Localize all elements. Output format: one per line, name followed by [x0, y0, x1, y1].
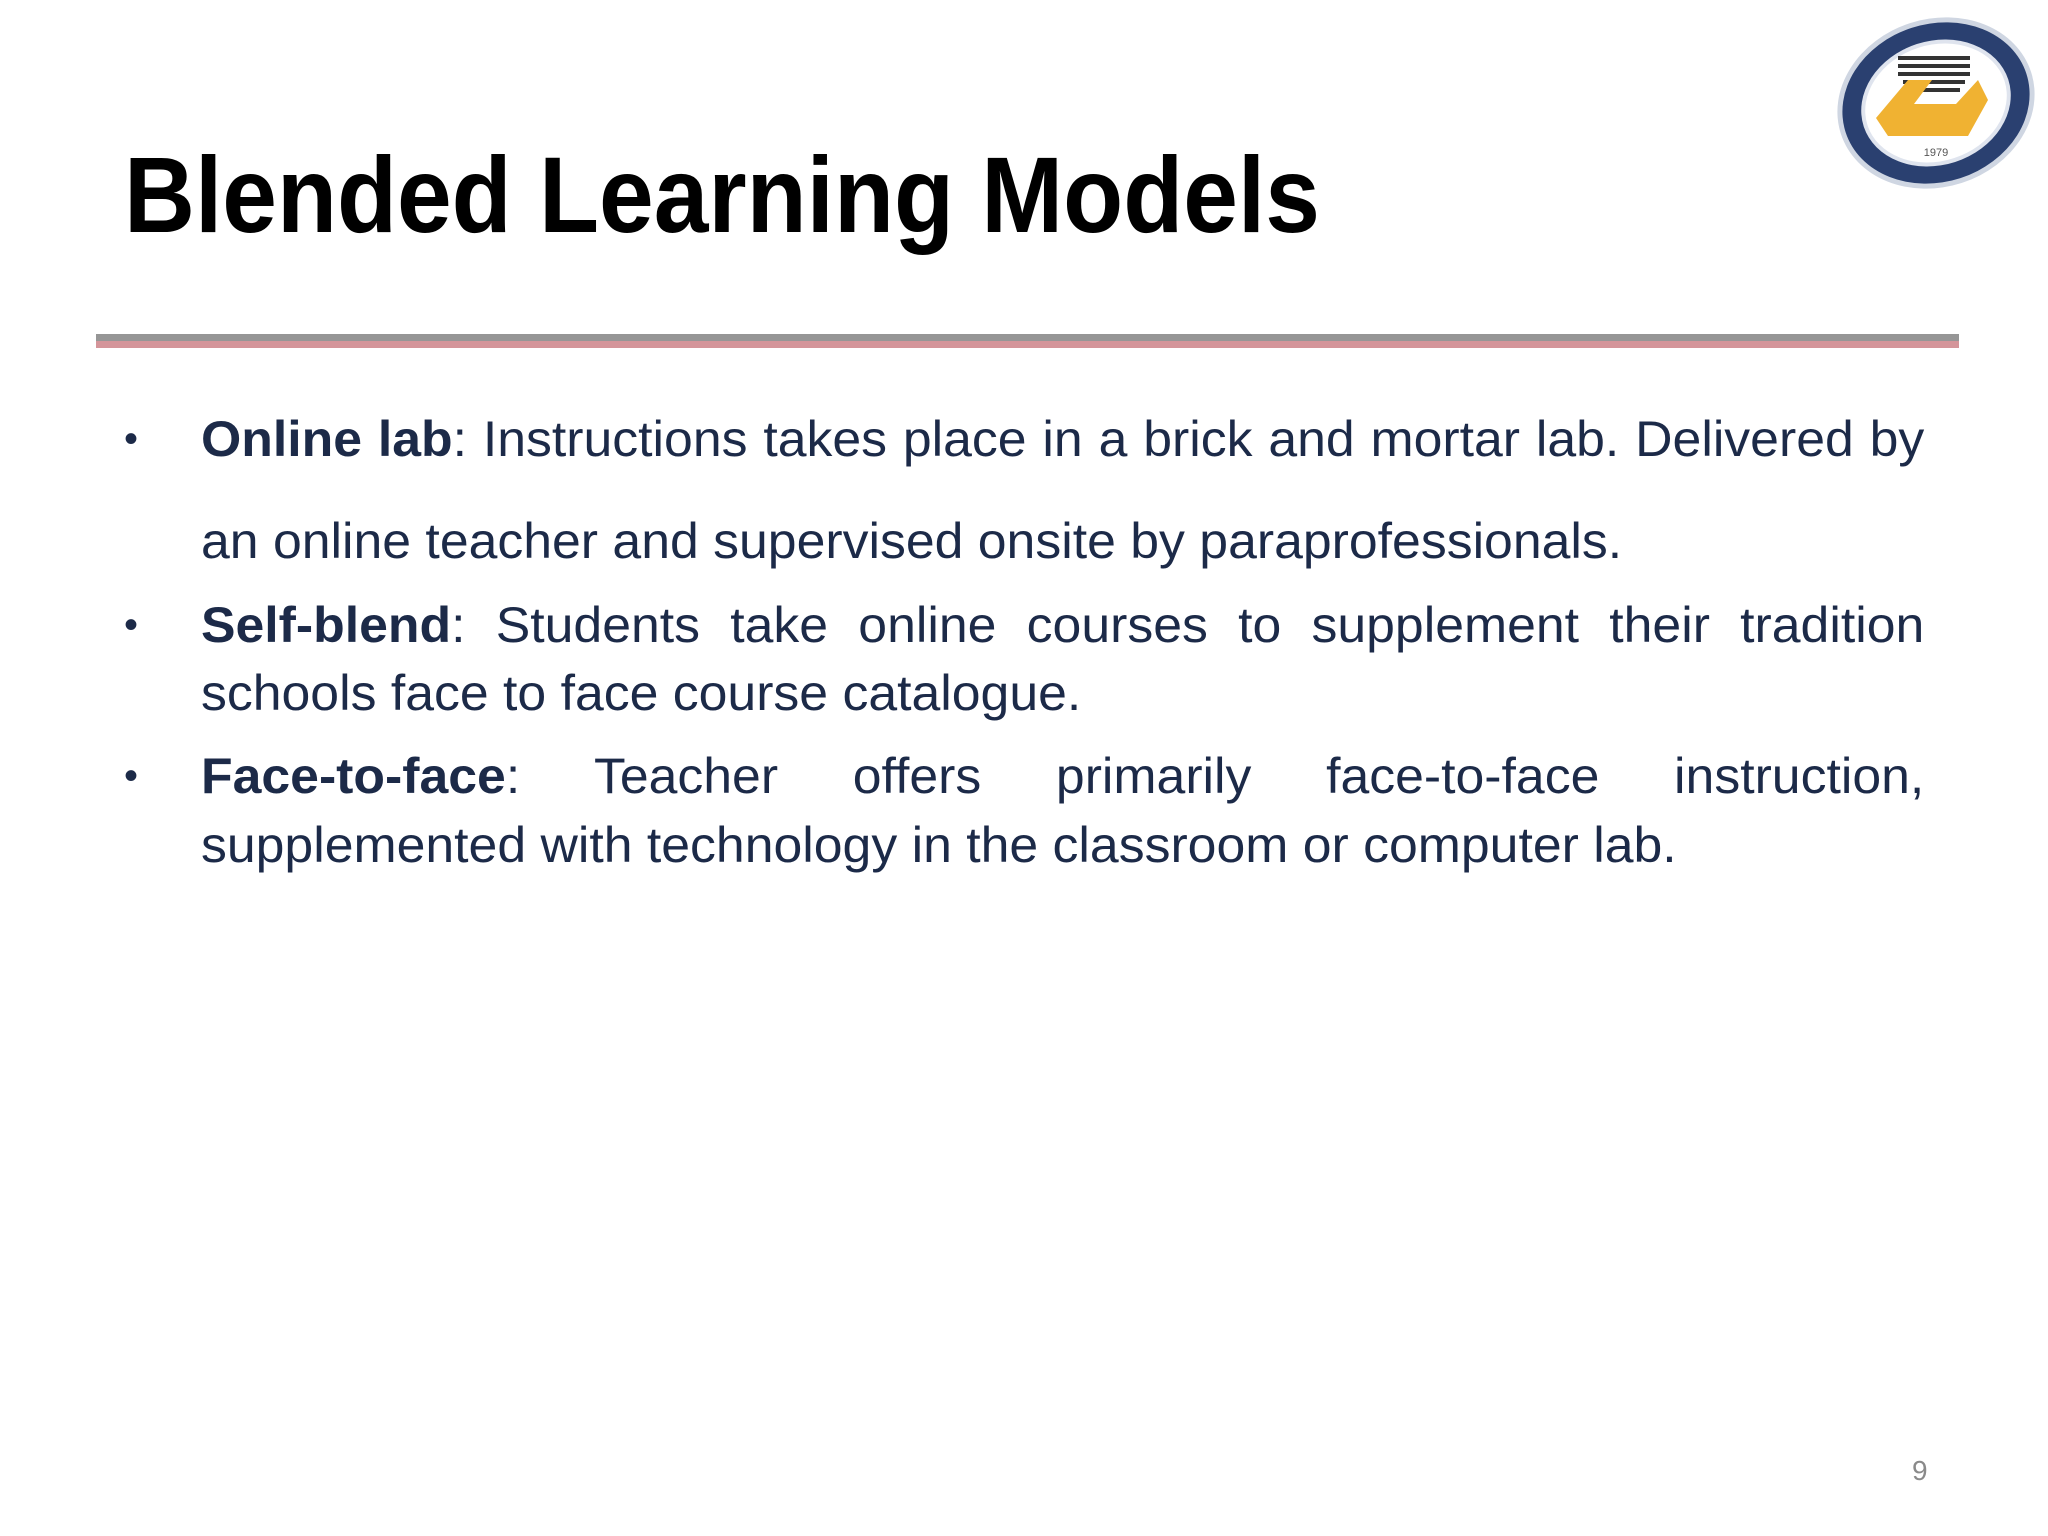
bullet list: •: [124, 603, 138, 647]
bullet list: Self-blend: Students take online courses to supplement their tradition: [201, 597, 1924, 653]
logo: [1838, 17, 2034, 189]
bullet 3: [124, 748, 1924, 873]
bullet 2: [124, 597, 1924, 721]
bullet list: Face-to-face: Teacher offers primarily face-to-face instruction,: [201, 748, 1924, 804]
bullet list: Online lab: Instructions takes place in a brick and mortar lab. Delivered by: [201, 411, 1924, 467]
bullet list: [124, 411, 1924, 873]
bullet list: •: [124, 754, 138, 798]
bullet list: •: [124, 417, 138, 461]
page number: 9: [1912, 1455, 1928, 1486]
bullet list: schools face to face course catalogue.: [201, 665, 1081, 721]
bullet list: supplemented with technology in the classroom or computer lab.: [201, 817, 1677, 873]
bullet list: an online teacher and supervised onsite by paraprofessionals.: [201, 513, 1622, 569]
bullet 1: [124, 411, 1924, 569]
title: Blended Learning Models: [124, 134, 1320, 255]
divider: [96, 334, 1959, 348]
logo: 1979: [1924, 147, 1948, 159]
